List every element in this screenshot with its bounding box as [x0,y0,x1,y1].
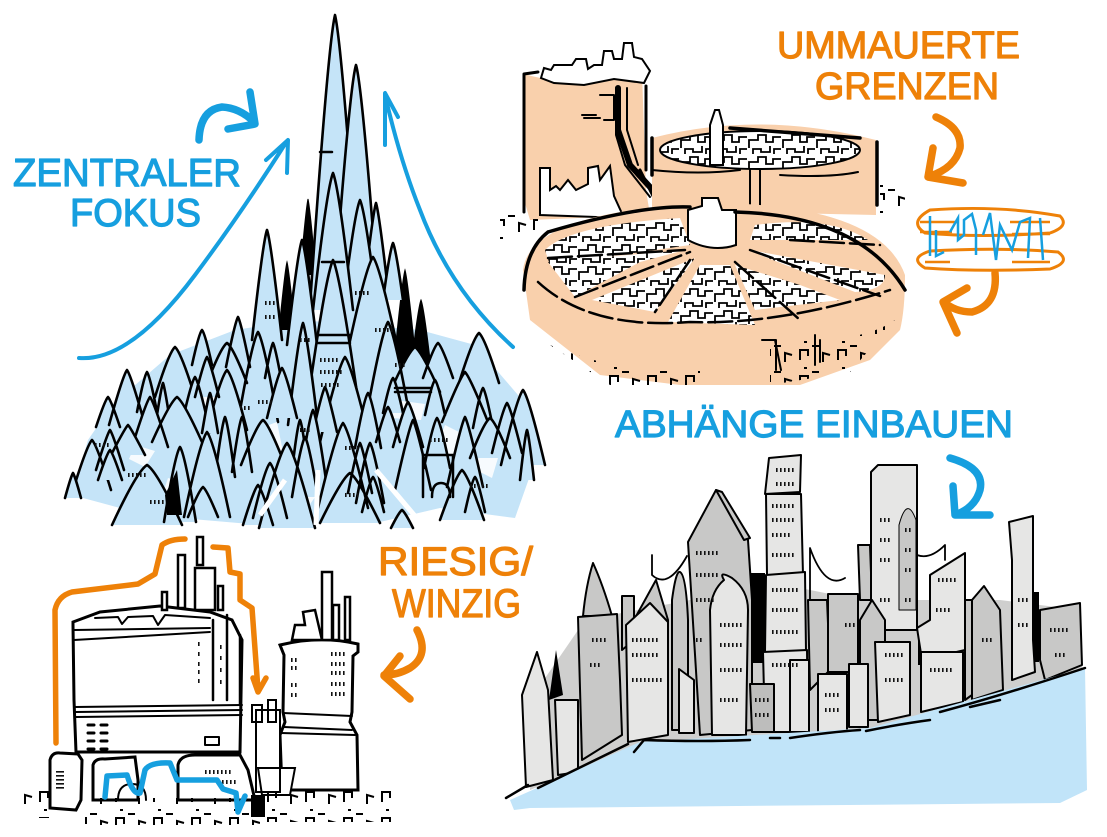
foreground spires [65,423,534,528]
heading: Zentraler Fokus: ZENTRALER [13,152,241,195]
panel: riesig/winzig towers [22,537,392,825]
heading: Zentraler Fokus [13,152,241,235]
base blocks [22,737,392,825]
streets and building details [260,470,420,525]
window dots [95,293,490,502]
heading: Riesig/Winzig [378,540,534,626]
near spires [73,390,545,490]
heading: Ummauerte Grenzen: GRENZEN [815,66,999,108]
arrow: long blue left upward [79,140,288,358]
large wheel city [523,198,905,385]
arrow: long blue right upward [385,93,513,347]
arrow: orange to towers [384,630,422,699]
skyline buildings [522,652,553,787]
right small tower [252,572,358,795]
panel: ummauerte Grenzen walled cities [500,43,905,385]
black back shadows [549,573,1039,700]
heading: Riesig/Winzig: RIESIG/ [378,540,534,584]
blue slope ground [510,668,1087,810]
slope shoreline [506,668,1085,798]
heading: Abhänge einbauen: ABHÄNGE EINBAUEN [615,404,1013,446]
arrow: orange to walled city [928,117,963,183]
main tall spires [252,15,403,400]
second row spires [96,357,493,448]
heading: Riesig/Winzig: WINZIG [392,582,521,626]
icon: stacked walled discs diagram [918,208,1063,270]
heading: Zentraler Fokus: FOKUS [70,192,201,235]
tall cylinder [524,43,660,220]
heading: Ummauerte Grenzen [777,25,1020,108]
panel: Abhänge einbauen skyline on slope [506,455,1087,810]
rubble edges [500,180,905,240]
big cylinder tower [73,537,242,752]
panel: zentraler Fokus spire city [65,15,545,528]
light blue wash [72,320,532,524]
mid-ground spires [155,317,499,425]
arrow: orange from disc diagram [943,273,995,333]
outline: blue small scale street [105,763,245,812]
arrow: blue to skyline [950,458,990,515]
window groups [590,470,1068,715]
white gaps between spires [129,385,498,510]
black back spires [279,199,431,372]
middle cylinder [652,110,877,215]
grey backdrop [530,580,1082,790]
heading: Ummauerte Grenzen: UMMAUERTE [777,25,1020,67]
arrow: blue curved to spire [199,92,255,140]
cables [652,545,945,612]
outline: orange big scale silhouette [55,539,266,743]
